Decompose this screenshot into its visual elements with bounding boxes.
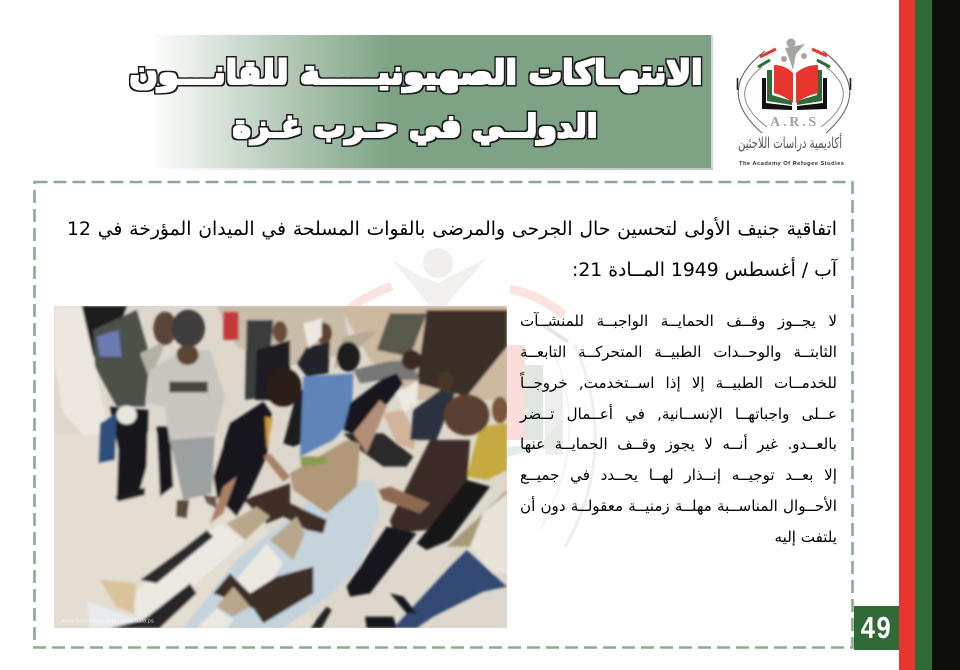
body line 3: للخدمــات الطبيــة إلا إذا اســتخدمت, خروجــاً xyxy=(520,374,837,392)
photo stretcher and covered patient xyxy=(87,440,380,628)
body line 8: يلتفت إليه xyxy=(775,528,837,546)
logo English name: The Academy Of Refugee Studies xyxy=(739,161,844,167)
logo figure xyxy=(781,38,807,70)
photo people, left xyxy=(54,306,225,518)
logo arcs xyxy=(738,49,850,133)
title line 2: الدولــي في حـرب غـزة xyxy=(233,109,597,145)
body line 1: لا يجــوز وقــف الحمايــة الواجبــة للمنشــآت xyxy=(520,312,837,330)
heading line 1: اتفاقية جنيف الأولى لتحسين حال الجرحى والمرضى بالقوات المسلحة في الميدان المؤرخة في 12 xyxy=(67,219,837,240)
photo man in dark shirt, right xyxy=(347,372,508,628)
photo people, background centre xyxy=(245,318,422,457)
page number badge: 49 xyxy=(861,610,892,645)
photo credit: www.SafaaNews.com | www.Safa.ps xyxy=(61,619,154,625)
dashed content frame xyxy=(33,180,854,649)
page number badge xyxy=(854,606,899,650)
title line 1: الانتهـاكات الصهيونيـــــة للقانـــون xyxy=(129,53,703,92)
photo: hospital corridor with stretcher xyxy=(54,306,507,628)
photo young man in black shirt xyxy=(210,368,302,523)
title banner xyxy=(150,35,711,168)
body line 4: عــلى واجباتهــا الإنســانية, في أعــمال تــضر xyxy=(520,405,837,423)
logo: The Academy of Refugee Studies xyxy=(736,38,852,167)
body text block xyxy=(519,312,837,546)
photo background xyxy=(54,306,507,628)
photo second stretcher xyxy=(343,400,417,467)
body line 6: إلا بعــد توجيــه إنــذار لهــا يحــدد في جميــع xyxy=(520,466,837,484)
heading line 2: آب / أغسطس 1949 المــادة 21: xyxy=(572,260,837,281)
body line 7: الأحــوال المناســبة مهلــة زمنيــة معقولــة دون أن xyxy=(520,497,837,515)
logo open book xyxy=(762,65,827,110)
logo A.R.S: A.R.S xyxy=(770,115,819,130)
body line 2: الثابتــة والوحــدات الطبيــة المتحركــة التابعــة xyxy=(520,343,837,361)
watermark logo xyxy=(346,248,596,548)
body line 5: بالعــدو. غير أنــه لا يجوز وقــف الحمايــة عنها xyxy=(520,435,837,453)
right stripes: red, green, black xyxy=(899,0,960,670)
